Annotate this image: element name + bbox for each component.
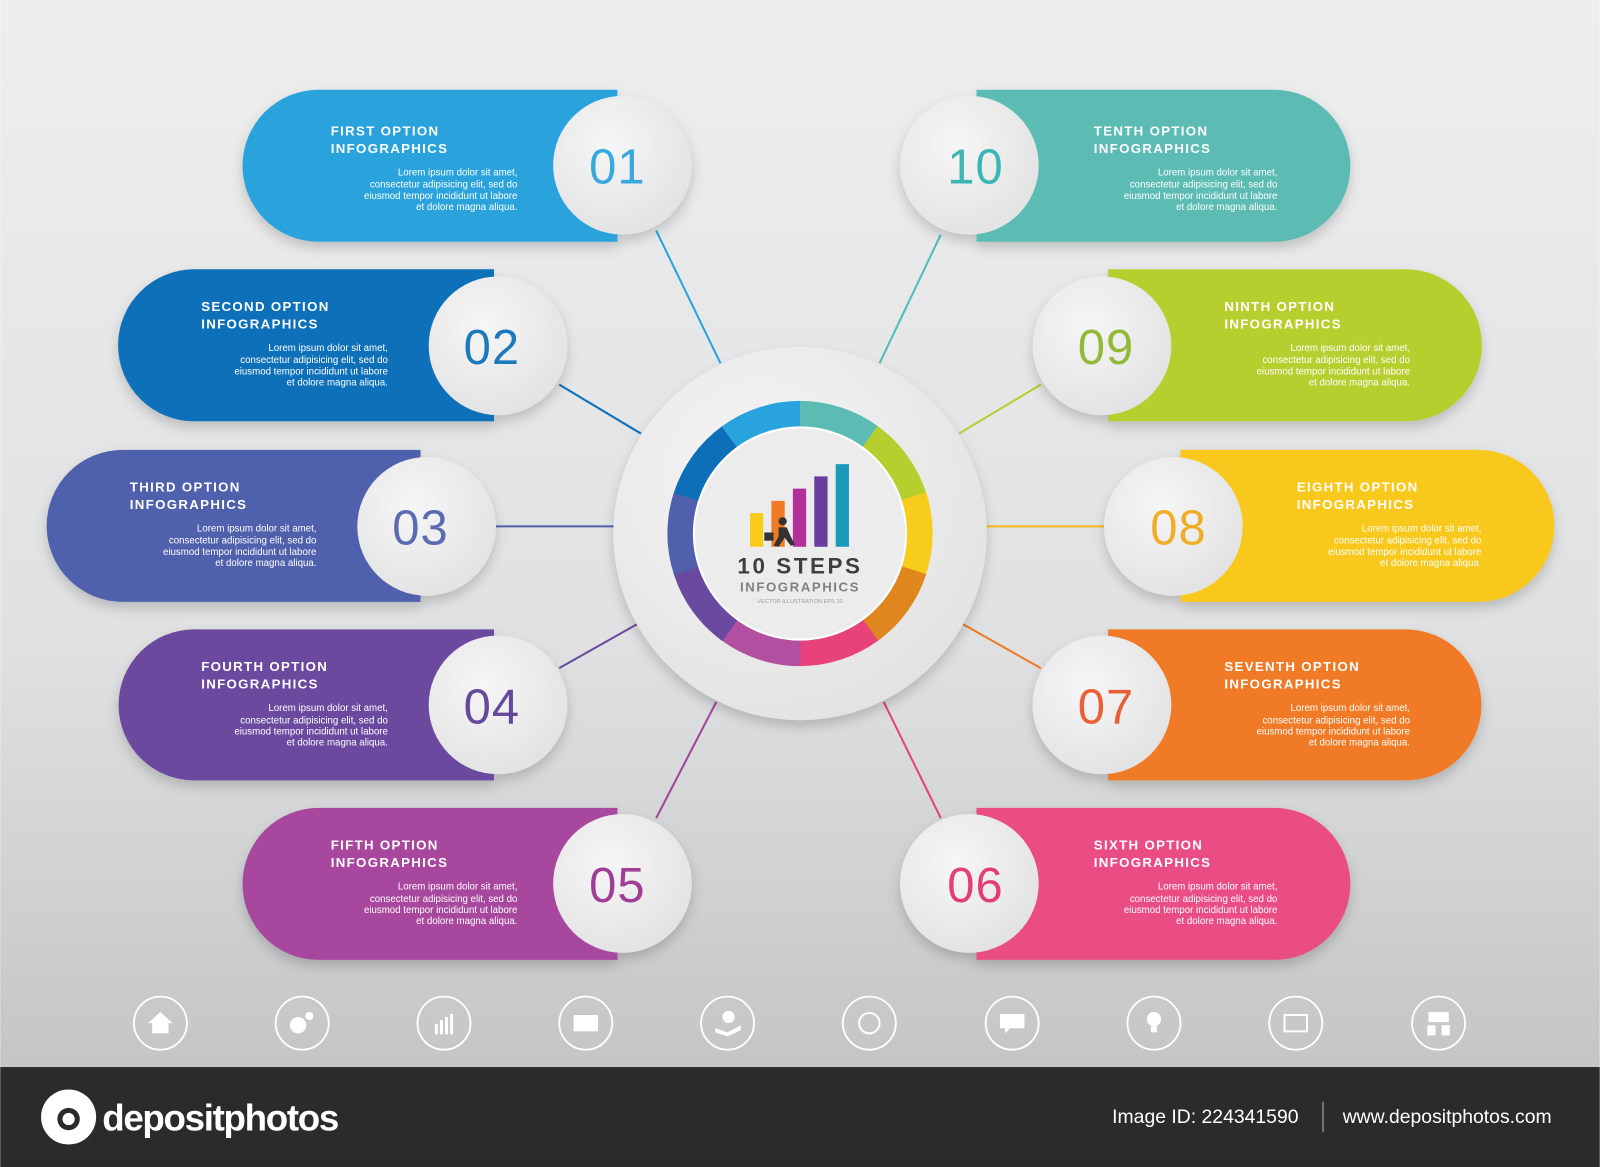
card 08: 08: [1150, 502, 1207, 556]
card 06: Lorem ipsum dolor sit amet,: [1158, 882, 1277, 893]
card 07: eiusmod tempor incididunt ut labore: [1257, 726, 1410, 737]
card 07: 07: [1078, 680, 1134, 734]
card 04: 04: [464, 680, 520, 734]
card 09: consectetur adipisicing elit, sed do: [1262, 355, 1410, 366]
card 05: [243, 808, 692, 960]
card 05: eiusmod tempor incididunt ut labore: [364, 905, 517, 916]
center circle: [613, 347, 987, 720]
card 05: consectetur adipisicing elit, sed do: [370, 894, 517, 905]
card 09: et dolore magna aliqua.: [1309, 378, 1410, 389]
card 06: eiusmod tempor incididunt ut labore: [1124, 905, 1277, 916]
card 08: EIGHTH OPTION: [1297, 480, 1419, 495]
card 04: INFOGRAPHICS: [201, 677, 319, 692]
card 04: FOURTH OPTION: [201, 659, 328, 674]
card 04: eiusmod tempor incididunt ut labore: [234, 726, 388, 737]
card 04: consectetur adipisicing elit, sed do: [240, 715, 388, 726]
card 03: Lorem ipsum dolor sit amet,: [197, 523, 316, 534]
card 02: SECOND OPTION: [201, 299, 330, 314]
card 04: Lorem ipsum dolor sit amet,: [268, 703, 388, 714]
ring segments: [633, 367, 967, 700]
card 05: INFOGRAPHICS: [331, 855, 448, 870]
card 03: THIRD OPTION: [130, 480, 241, 495]
card 10: [900, 90, 1350, 242]
image id: Image ID: 224341590: [1112, 1106, 1299, 1128]
card 06: [900, 808, 1350, 960]
card 05: FIFTH OPTION: [331, 838, 439, 853]
footer bar: www.depositphotos.com: [1342, 1106, 1552, 1128]
card 06: SIXTH OPTION: [1094, 838, 1203, 853]
card 02: eiusmod tempor incididunt ut labore: [234, 366, 388, 377]
card 10: consectetur adipisicing elit, sed do: [1130, 180, 1277, 191]
card 01: consectetur adipisicing elit, sed do: [370, 180, 517, 191]
card 06: et dolore magna aliqua.: [1176, 916, 1277, 927]
card 02: Lorem ipsum dolor sit amet,: [268, 343, 388, 354]
center title: 10 STEPS: [737, 553, 863, 578]
card 01: eiusmod tempor incididunt ut labore: [364, 191, 517, 202]
card 06: 06: [947, 859, 1004, 913]
card 09: 09: [1078, 321, 1134, 375]
card 02: 02: [464, 321, 520, 375]
card 10: Lorem ipsum dolor sit amet,: [1158, 167, 1277, 178]
card 08: eiusmod tempor incididunt ut labore: [1328, 547, 1481, 558]
card 08: [1104, 450, 1554, 602]
logo: depositphotos: [102, 1097, 338, 1138]
card 07: [1033, 629, 1481, 780]
bar chart icon: [750, 464, 849, 547]
card 09: [1033, 269, 1482, 421]
card 10: 10: [947, 141, 1004, 195]
card 10: eiusmod tempor incididunt ut labore: [1124, 191, 1277, 202]
card 06: INFOGRAPHICS: [1094, 855, 1211, 870]
card 07: Lorem ipsum dolor sit amet,: [1290, 703, 1410, 714]
icon row: [134, 997, 1465, 1050]
card 02: INFOGRAPHICS: [201, 316, 319, 331]
card 08: INFOGRAPHICS: [1297, 497, 1414, 512]
card 07: consectetur adipisicing elit, sed do: [1262, 715, 1410, 726]
card 04: [119, 629, 567, 780]
card 08: et dolore magna aliqua.: [1380, 558, 1481, 569]
card 03: INFOGRAPHICS: [130, 497, 247, 512]
card 09: Lorem ipsum dolor sit amet,: [1290, 343, 1410, 354]
card 05: Lorem ipsum dolor sit amet,: [398, 882, 517, 893]
card 01: FIRST OPTION: [331, 124, 439, 139]
card 10: INFOGRAPHICS: [1094, 141, 1211, 156]
card 10: TENTH OPTION: [1094, 124, 1208, 139]
card 03: consectetur adipisicing elit, sed do: [169, 536, 316, 547]
logo: [41, 1089, 338, 1145]
card 02: consectetur adipisicing elit, sed do: [240, 355, 388, 366]
card 08: Lorem ipsum dolor sit amet,: [1362, 523, 1481, 534]
card 10: et dolore magna aliqua.: [1176, 202, 1277, 213]
card 05: 05: [589, 859, 646, 913]
card 06: consectetur adipisicing elit, sed do: [1130, 894, 1277, 905]
center circle: INFOGRAPHICS: [740, 580, 860, 595]
card 01: et dolore magna aliqua.: [416, 202, 517, 213]
card 01: [243, 90, 692, 242]
card 03: 03: [392, 502, 449, 556]
card 02: [118, 269, 567, 421]
card 07: INFOGRAPHICS: [1224, 677, 1342, 692]
card 09: INFOGRAPHICS: [1224, 316, 1342, 331]
card 01: 01: [589, 141, 646, 195]
card 01: Lorem ipsum dolor sit amet,: [398, 167, 517, 178]
card 05: et dolore magna aliqua.: [416, 916, 517, 927]
center circle: VECTOR ILLUSTRATION EPS 10: [757, 599, 843, 605]
card 07: et dolore magna aliqua.: [1309, 738, 1410, 749]
card 04: et dolore magna aliqua.: [287, 738, 388, 749]
card 09: NINTH OPTION: [1224, 299, 1335, 314]
card 09: eiusmod tempor incididunt ut labore: [1257, 366, 1410, 377]
card 01: INFOGRAPHICS: [331, 141, 448, 156]
card 03: et dolore magna aliqua.: [215, 558, 316, 569]
card 02: et dolore magna aliqua.: [287, 378, 388, 389]
card 08: consectetur adipisicing elit, sed do: [1334, 536, 1481, 547]
card 03: eiusmod tempor incididunt ut labore: [163, 547, 316, 558]
card 07: SEVENTH OPTION: [1224, 659, 1360, 674]
footer bar: [0, 1067, 1600, 1167]
connector lines: [496, 231, 1104, 818]
card 03: [47, 450, 496, 602]
